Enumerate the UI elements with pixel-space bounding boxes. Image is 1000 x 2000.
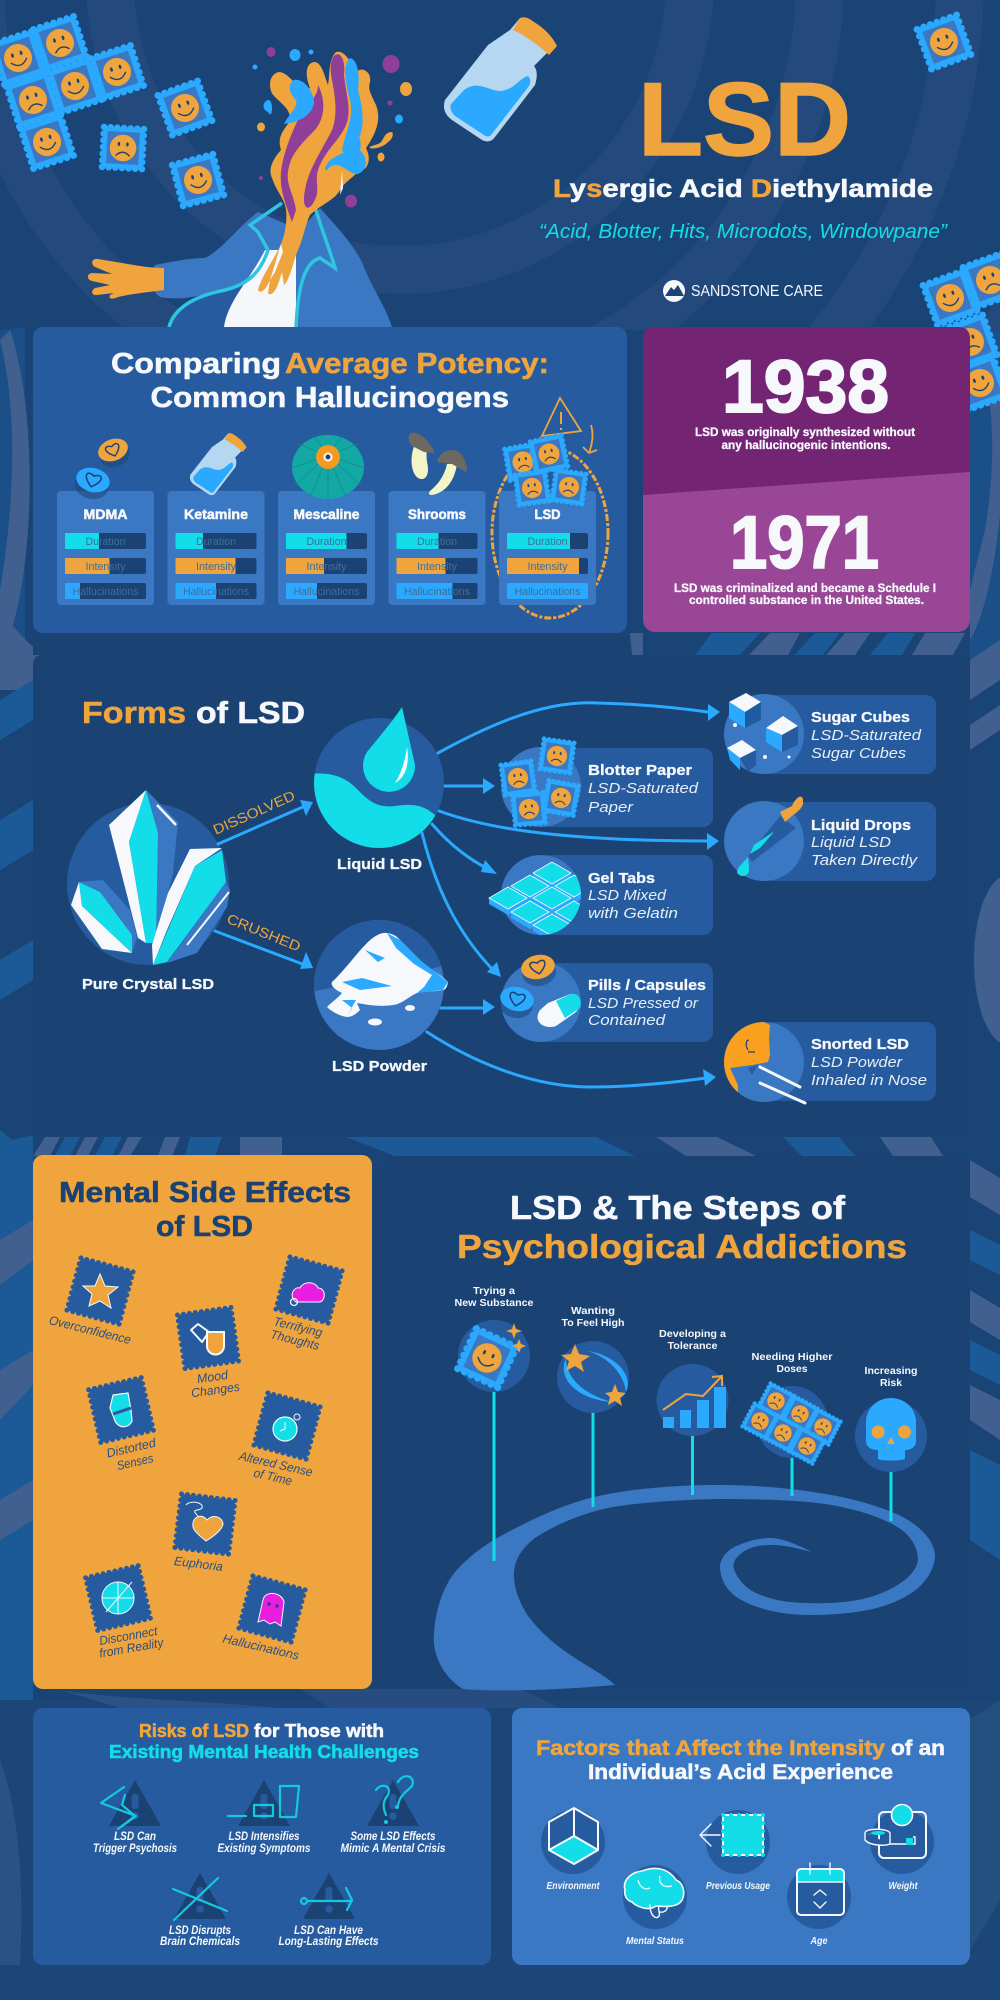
- step 1: trying a new substance: Trying a: [473, 1285, 515, 1297]
- step 2: wanting to feel high: Wanting: [571, 1305, 615, 1317]
- label: pure crystal: Pure Crystal LSD: [82, 976, 214, 993]
- card: pills and capsules: Pills / Capsules: [588, 977, 706, 994]
- heading: Common Hallucinogens: [150, 382, 509, 414]
- step 3: developing a tolerance: Developing a: [659, 1328, 726, 1340]
- heading: of an: [891, 1737, 945, 1760]
- card: Mescaline: Mescaline: [294, 506, 360, 522]
- factor: previous usage: [700, 1810, 770, 1892]
- year 1938: LSD was originally synthesized without: [695, 425, 915, 439]
- card: liquid drops: [724, 797, 936, 881]
- effect: hallucinations: [221, 1576, 305, 1663]
- scribble around LSD card: [492, 448, 608, 618]
- year 1938: 1938: [722, 345, 889, 428]
- card: MDMA: [57, 491, 154, 605]
- card: MDMA: Hallucinations: [72, 586, 139, 598]
- step 4: needing higher doses: Doses: [776, 1363, 808, 1375]
- card: MDMA: Duration: [86, 536, 126, 548]
- card: pills and capsules: Contained: [588, 1012, 666, 1029]
- effect: mood changes: [178, 1308, 241, 1400]
- factor: weight: Weight: [888, 1881, 918, 1892]
- icon: blotter stamps: [501, 739, 579, 825]
- card: sugar cubes: Sugar Cubes: [811, 709, 910, 726]
- step 1: trying a new substance: New Substance: [454, 1297, 534, 1309]
- heading: LSD & The Steps of: [510, 1189, 846, 1226]
- icon: mushrooms: [409, 433, 467, 495]
- step 4: needing higher doses: Needing Higher: [752, 1351, 832, 1363]
- year 1938: [695, 345, 915, 452]
- card: MDMA: MDMA: [84, 506, 128, 522]
- risk: psychosis: LSD Can: [114, 1831, 156, 1843]
- icon: dropper: [737, 797, 803, 876]
- decorative stamps: right edge: [923, 253, 1000, 410]
- illustration: person with psychedelic liquid head: [88, 47, 412, 327]
- card: sugar cubes: Sugar Cubes: [811, 745, 907, 762]
- icon: liquid LSD: [314, 707, 444, 848]
- step 2: wanting to feel high: To Feel High: [562, 1317, 624, 1329]
- effect: disconnect from reality: from Reality: [98, 1635, 165, 1661]
- year 1971: [674, 501, 936, 607]
- risk: brain chemicals: Brain Chemicals: [160, 1936, 240, 1948]
- icon: large vial: [444, 17, 557, 141]
- factor: weight: [865, 1804, 934, 1892]
- card: Ketamine: [168, 491, 264, 605]
- factor: environment: Environment: [546, 1881, 600, 1892]
- heading: Comparing: [111, 348, 281, 380]
- card: LSD: Duration: [528, 536, 568, 548]
- card: Shrooms: [388, 491, 486, 605]
- panel: risks of LSD: [33, 1708, 491, 1965]
- decorative stamps: sheet top left: [0, 17, 143, 168]
- risk: brain chemicals: [160, 1873, 240, 1948]
- liquid stream orange: [258, 52, 378, 294]
- card: blotter paper: Blotter Paper: [588, 762, 692, 779]
- card: Mescaline: Hallucinations: [294, 586, 360, 598]
- panel: forms of LSD: [33, 633, 970, 1135]
- spiral path: [434, 1485, 935, 1690]
- logo: Sandstone Care: SANDSTONE CARE: [691, 283, 823, 300]
- card: liquid drops: Liquid LSD: [811, 834, 891, 851]
- card: gel tabs: Gel Tabs: [588, 870, 655, 887]
- effect: euphoria: [173, 1494, 235, 1574]
- heading: [457, 1189, 907, 1265]
- droplets: [252, 47, 412, 208]
- risk: long lasting effects: Long-Lasting Effects: [278, 1936, 378, 1948]
- heading: Average Potency:: [285, 348, 549, 380]
- effect: altered sense of time: Altered Sense: [237, 1449, 314, 1479]
- card: snorted LSD: Inhaled in Nose: [811, 1072, 927, 1089]
- effect: terrifying thoughts: Terrifying: [272, 1314, 324, 1340]
- panel: key dates: [643, 327, 970, 632]
- decorative stamps: floating: [102, 15, 971, 206]
- card: LSD: Intensity: [528, 561, 568, 573]
- heading: [82, 695, 305, 730]
- arrow: dissolved: DISSOLVED: [211, 787, 297, 838]
- card: sugar cubes: [724, 693, 936, 774]
- label: liquid LSD: Liquid LSD: [337, 856, 422, 873]
- liquid stream blue: [284, 58, 366, 174]
- heading: Existing Mental Health Challenges: [109, 1742, 419, 1762]
- panel: comparing potency: [33, 327, 627, 633]
- arrow: crushed: [215, 910, 313, 969]
- risk: intensifies symptoms: Existing Symptoms: [218, 1843, 310, 1855]
- heading: for Those with: [254, 1721, 384, 1741]
- logo: Sandstone Care: [663, 280, 823, 302]
- heading: [536, 1737, 945, 1784]
- card: Shrooms: Intensity: [417, 561, 457, 573]
- heading: Factors that Affect the Intensity: [536, 1737, 885, 1760]
- heading: of LSD: [156, 1211, 253, 1243]
- risk: long lasting effects: [278, 1873, 378, 1948]
- effect: altered sense of time: of Time: [252, 1466, 294, 1488]
- factor: mental status: Mental Status: [626, 1936, 684, 1947]
- risk: mimic crisis: Some LSD Effects: [350, 1831, 436, 1843]
- factor: age: [787, 1863, 851, 1947]
- label: LSD powder: LSD Powder: [332, 1058, 427, 1075]
- risk: intensifies symptoms: [218, 1780, 310, 1855]
- heading: [109, 1721, 419, 1762]
- liquid stream purple: [281, 54, 349, 222]
- step 5: increasing risk: Increasing: [864, 1365, 918, 1377]
- icon: sugar cubes: [727, 693, 798, 772]
- heading: Risks of LSD: [139, 1721, 249, 1741]
- effect: disconnect from reality: Disconnect: [98, 1624, 159, 1648]
- step 3: developing a tolerance: [656, 1328, 728, 1495]
- effect: hallucinations: Hallucinations: [221, 1632, 300, 1663]
- step 1: trying a new substance: [454, 1285, 534, 1561]
- card: snorted LSD: LSD Powder: [811, 1054, 903, 1071]
- risk: mimic crisis: Mimic A Mental Crisis: [340, 1843, 446, 1855]
- arrows: flows to forms: [422, 703, 720, 1087]
- card: blotter paper: LSD-Saturated: [588, 780, 699, 797]
- card: pills and capsules: [496, 952, 713, 1042]
- title: LSD: [638, 62, 851, 178]
- factor: previous usage: Previous Usage: [706, 1881, 770, 1892]
- card: liquid drops: Liquid Drops: [811, 817, 911, 834]
- effect: distorted senses: [89, 1378, 158, 1473]
- card: gel tabs: LSD Mixed: [588, 887, 667, 904]
- card: Shrooms: Shrooms: [408, 506, 466, 522]
- step 3: developing a tolerance: Tolerance: [668, 1340, 718, 1352]
- heading: Psychological Addictions: [457, 1228, 907, 1265]
- icon: pills and capsule: [496, 952, 581, 1027]
- effect: terrifying thoughts: [269, 1257, 342, 1353]
- icon: nose and lines: [720, 1020, 805, 1103]
- year 1938: any hallucinogenic intentions.: [722, 438, 890, 452]
- effect: mood changes: Mood: [196, 1368, 230, 1386]
- panel: mental side effects: [33, 1155, 372, 1689]
- effect: distorted senses: Senses: [115, 1451, 155, 1473]
- factor: environment: [541, 1808, 605, 1892]
- step 5: increasing risk: Risk: [880, 1377, 902, 1389]
- heading: of LSD: [196, 695, 305, 730]
- effect: disconnect from reality: [86, 1566, 165, 1661]
- risk: mimic crisis: [340, 1776, 446, 1855]
- icon: mescaline cactus: [292, 435, 364, 499]
- card: gel tabs: with Gelatin: [588, 905, 678, 922]
- heading: Mental Side Effects: [59, 1177, 351, 1209]
- icon: LSD stamps and warning: [505, 398, 597, 505]
- arrow: crushed: CRUSHED: [225, 910, 303, 954]
- risk: psychosis: [93, 1780, 177, 1855]
- card: pills and capsules: LSD Pressed or: [588, 995, 699, 1012]
- card: Ketamine: Duration: [196, 536, 236, 548]
- icon: gel tabs: [488, 862, 581, 936]
- risk: psychosis: Trigger Psychosis: [93, 1843, 177, 1855]
- year 1971: LSD was criminalized and became a Schedule I: [674, 581, 936, 595]
- card: Mescaline: Duration: [306, 536, 346, 548]
- card: LSD: [499, 491, 596, 605]
- effect: euphoria: Euphoria: [173, 1554, 224, 1574]
- effect: altered sense of time: [237, 1393, 320, 1488]
- heading: Forms: [82, 695, 186, 730]
- risk: intensifies symptoms: LSD Intensifies: [228, 1831, 300, 1843]
- card: gel tabs: [489, 855, 713, 942]
- year 1971: controlled substance in the United States.: [689, 593, 924, 607]
- card: MDMA: Intensity: [86, 561, 126, 573]
- card: sugar cubes: LSD-Saturated: [811, 727, 922, 744]
- card: snorted LSD: [720, 1020, 936, 1103]
- effect: terrifying thoughts: Thoughts: [269, 1327, 321, 1353]
- icon: pure crystal: [67, 790, 230, 965]
- card: Ketamine: Hallucinations: [183, 586, 249, 598]
- effect: mood changes: Changes: [190, 1380, 241, 1400]
- arrow: dissolved: [211, 787, 313, 844]
- coat: [151, 208, 392, 327]
- step 4: needing higher doses: [742, 1351, 841, 1496]
- card: blotter paper: Paper: [588, 799, 634, 816]
- card: Ketamine: Ketamine: [184, 506, 248, 522]
- card: LSD: LSD: [534, 506, 560, 522]
- panel: steps of psychological addiction: [372, 1156, 970, 1690]
- street names: “Acid, Blotter, Hits, Microdots, Windowpane”: [539, 221, 948, 243]
- effect: distorted senses: Distorted: [105, 1435, 158, 1461]
- card: Mescaline: Intensity: [306, 561, 347, 573]
- hand: [88, 259, 164, 299]
- effect: overconfidence: [48, 1258, 133, 1347]
- card: LSD: Hallucinations: [514, 586, 581, 598]
- factor: mental status: [623, 1865, 687, 1947]
- heading: Individual’s Acid Experience: [588, 1761, 893, 1784]
- card: Shrooms: Duration: [417, 536, 457, 548]
- heading: [59, 1177, 351, 1243]
- subtitle: Lysergic Acid Diethylamide: [553, 175, 933, 203]
- effect: overconfidence: Overconfidence: [48, 1313, 132, 1347]
- card: Mescaline: [278, 491, 375, 605]
- card: Shrooms: Hallucinations: [404, 586, 470, 598]
- icon: MDMA pills: [72, 435, 133, 503]
- factor: age: Age: [810, 1936, 828, 1947]
- icon: ketamine vial: [190, 433, 246, 495]
- step 2: wanting to feel high: [557, 1305, 629, 1507]
- step 5: increasing risk: [855, 1365, 927, 1521]
- year 1971: 1971: [730, 501, 879, 584]
- card: liquid drops: Taken Directly: [811, 852, 919, 869]
- card: snorted LSD: Snorted LSD: [811, 1036, 909, 1053]
- heading: [111, 348, 549, 414]
- risk: brain chemicals: LSD Disrupts: [169, 1925, 231, 1937]
- white shirt drips highlight: [270, 170, 343, 280]
- card: blotter paper: [501, 739, 713, 827]
- risk: long lasting effects: LSD Can Have: [294, 1925, 364, 1937]
- card: Ketamine: Intensity: [196, 561, 236, 573]
- panel: factors affecting intensity: [512, 1708, 970, 1965]
- icon: LSD powder: [310, 915, 450, 1050]
